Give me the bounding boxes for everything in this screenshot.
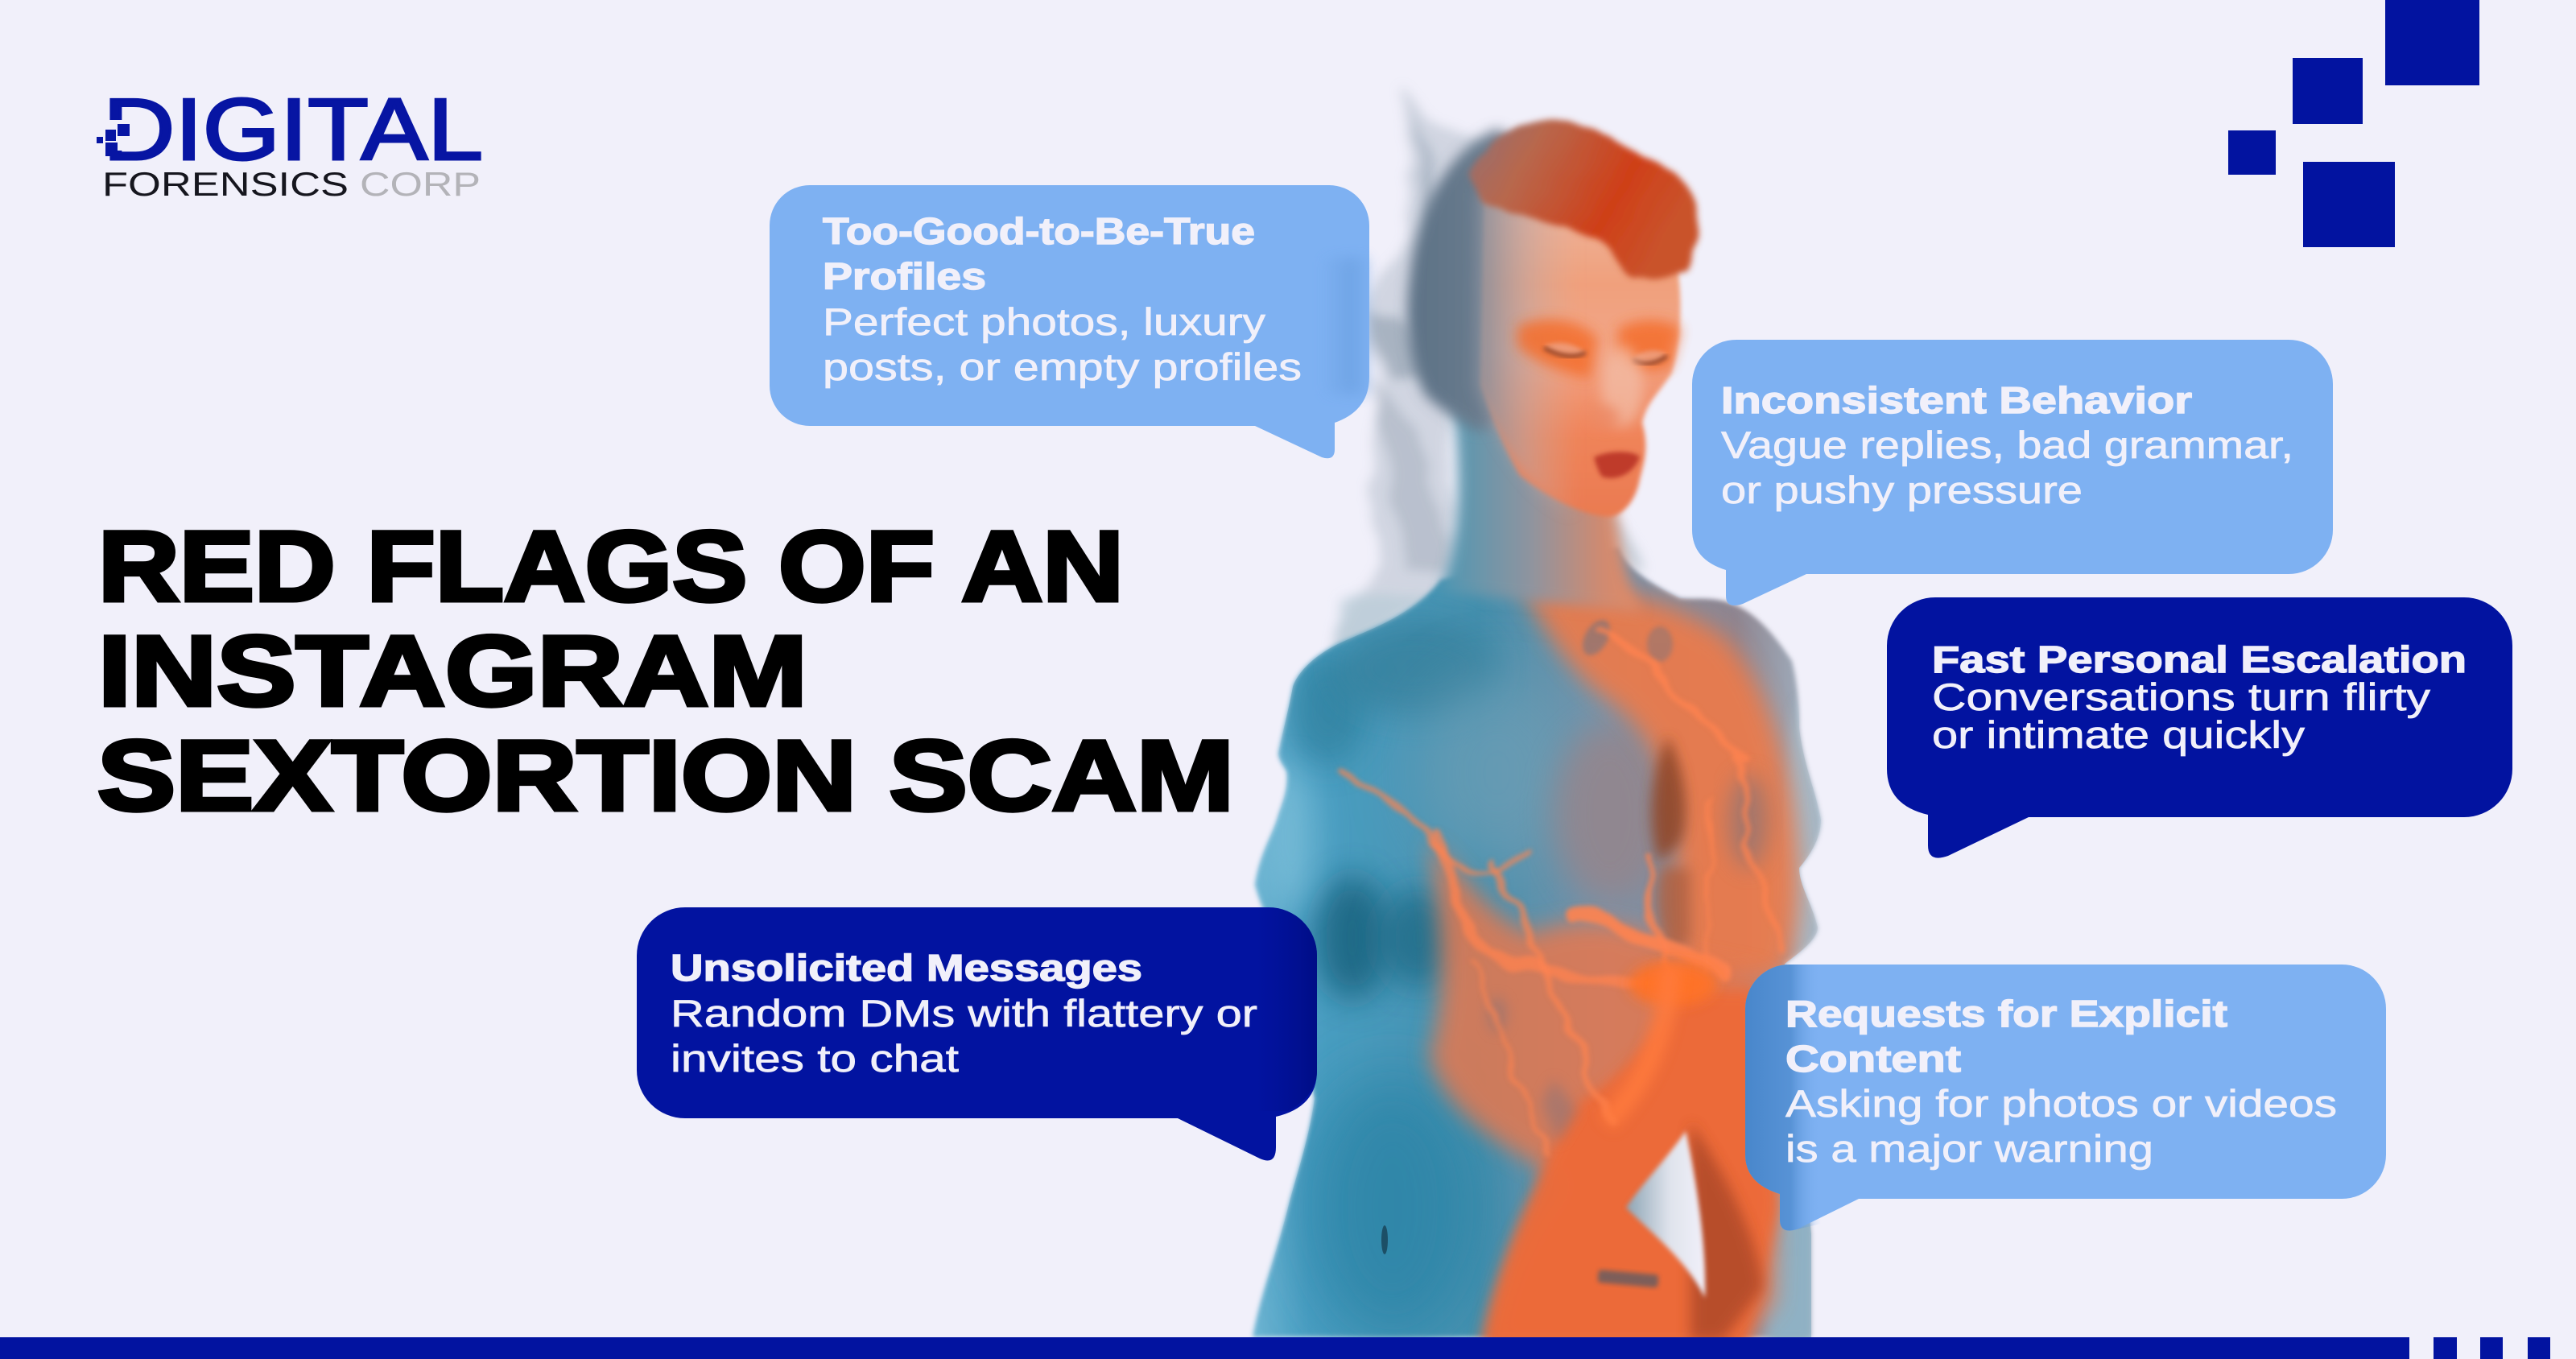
callout text: Inconsistent Behavior bbox=[1721, 379, 2192, 421]
soft flame masses bbox=[1429, 583, 1798, 1349]
lips bbox=[1594, 452, 1640, 478]
background gap between torso and arm bbox=[1626, 1131, 1705, 1298]
decorative squares top right bbox=[2228, 0, 2479, 247]
logo word FORENSICS: FORENSICS bbox=[102, 165, 349, 203]
logo pixel squares bbox=[97, 120, 130, 156]
neck bbox=[1441, 403, 1642, 612]
callout text: invites to chat bbox=[671, 1037, 959, 1080]
callout text bbox=[1785, 993, 2337, 1170]
callout text: Unsolicited Messages bbox=[671, 947, 1142, 989]
callout: inconsistent behavior bbox=[1692, 340, 2333, 605]
callout text: Conversations turn flirty bbox=[1932, 675, 2431, 718]
callout: unsolicited messages bbox=[637, 907, 1317, 1161]
nose bbox=[1591, 346, 1643, 428]
callout text bbox=[1932, 638, 2467, 756]
footer bar with squares bbox=[0, 1337, 2550, 1359]
back of head and ear bbox=[1408, 129, 1554, 431]
title bbox=[97, 511, 1234, 832]
logo word CORP: CORP bbox=[360, 165, 481, 203]
callout: requests for explicit content bbox=[1745, 965, 2386, 1230]
title: INSTAGRAM bbox=[98, 616, 807, 727]
callout text: or pushy pressure bbox=[1721, 469, 2083, 511]
callout text bbox=[1721, 379, 2293, 511]
figure: translucent woman with blue and orange smoke bbox=[1253, 83, 1821, 1349]
hair bbox=[1469, 121, 1698, 279]
smoke veil behind head bbox=[1335, 83, 1643, 656]
face bbox=[1475, 184, 1681, 517]
callout: too-good-to-be-true profiles bbox=[770, 185, 1369, 458]
callout text: Vague replies, bad grammar, bbox=[1721, 423, 2293, 466]
callout: fast personal escalation bbox=[1887, 597, 2512, 858]
title: RED FLAGS OF AN bbox=[98, 511, 1124, 622]
orange flames over chest and waist bbox=[1344, 583, 1798, 1349]
darker mauve inside flames bbox=[1488, 615, 1768, 1143]
callout text: Random DMs with flattery or bbox=[671, 992, 1257, 1035]
callout text: Too-Good-to-Be-True bbox=[823, 210, 1255, 252]
callout text bbox=[823, 210, 1302, 388]
logo: Digital Forensics Corp bbox=[97, 81, 483, 203]
callout text: Content bbox=[1785, 1038, 1961, 1080]
callout text: Requests for Explicit bbox=[1785, 993, 2227, 1035]
callout text: Perfect photos, luxury bbox=[823, 300, 1266, 343]
body silhouette bbox=[1253, 547, 1821, 1345]
callout text: Asking for photos or videos bbox=[1785, 1082, 2337, 1125]
callout text: Fast Personal Escalation bbox=[1932, 638, 2467, 680]
eye band and eyes bbox=[1517, 320, 1681, 378]
logo wordmark DIGITAL: DIGITAL bbox=[103, 81, 483, 179]
callout text: is a major warning bbox=[1785, 1127, 2153, 1170]
callout text bbox=[671, 947, 1257, 1080]
title: SEXTORTION SCAM bbox=[97, 721, 1234, 832]
callout text: or intimate quickly bbox=[1932, 713, 2306, 756]
callout text: posts, or empty profiles bbox=[823, 345, 1302, 388]
flame wisps bbox=[1344, 636, 1783, 1143]
callout text: Profiles bbox=[823, 255, 986, 297]
